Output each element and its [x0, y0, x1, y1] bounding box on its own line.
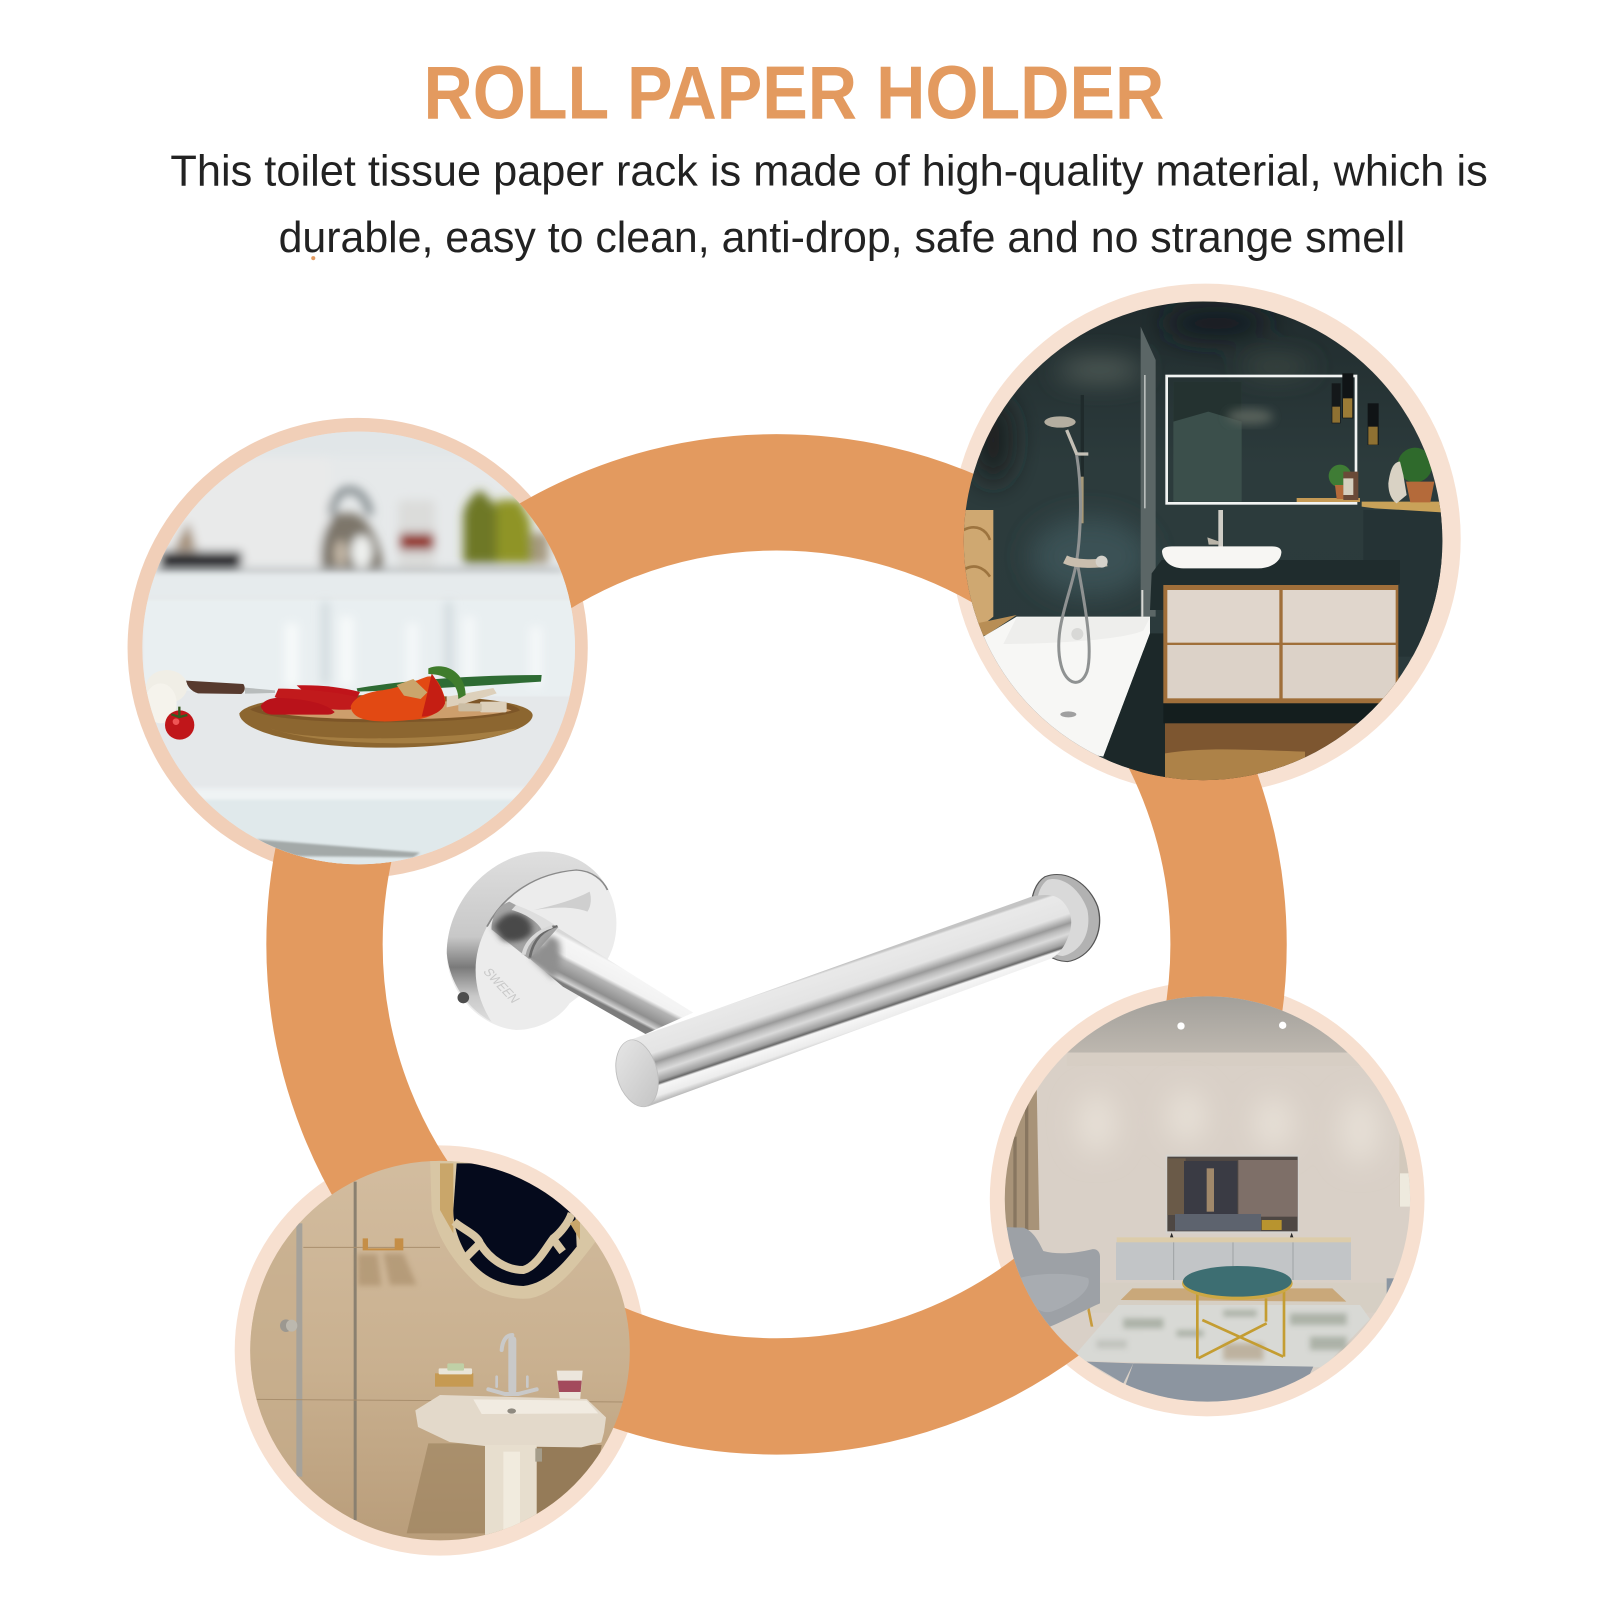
- wood panel: [960, 510, 1017, 637]
- infographic canvas: [128, 66, 1486, 1556]
- description text: This toilet tissue paper rack is made of high-quality material, which is: [170, 147, 1488, 196]
- support arm: [491, 902, 693, 1034]
- sink with faucet: [1150, 510, 1364, 610]
- wall base disc: SWEEN: [480, 966, 523, 1005]
- door knob: [280, 1319, 297, 1332]
- mirror: [1167, 376, 1356, 503]
- TV: [1166, 1155, 1299, 1233]
- towel shelf: [357, 1238, 417, 1286]
- wood floor: [1165, 723, 1358, 780]
- rug: [1070, 1305, 1370, 1367]
- description text: durable, easy to clean, anti-drop, safe and no strange smell: [279, 213, 1405, 262]
- shelf with plants: [1297, 448, 1442, 512]
- bathtub: [983, 617, 1150, 757]
- mushrooms and tomato: [145, 670, 194, 740]
- armchair: [1000, 1227, 1100, 1327]
- pendant lamps: [1332, 373, 1379, 445]
- photo: beige bathroom: [240, 1150, 640, 1550]
- product: toilet paper holder: [447, 852, 1100, 1107]
- mirror: [430, 1150, 597, 1299]
- vegetables: [261, 666, 542, 721]
- photo: living room: [1004, 996, 1410, 1402]
- washbasin: [415, 1395, 606, 1538]
- horizontal bar: [630, 895, 1071, 1107]
- faucet: [488, 1335, 537, 1394]
- photo: kitchen: [142, 432, 575, 864]
- wall art: [1400, 1135, 1410, 1206]
- description text: [170, 147, 1488, 262]
- knife: [186, 681, 275, 694]
- cutting board: [239, 695, 533, 748]
- coffee table: [1182, 1266, 1293, 1358]
- title: ROLL PAPER HOLDER: [423, 51, 1164, 135]
- door frames: [257, 1182, 627, 1520]
- right wall: [1412, 510, 1442, 657]
- vanity cabinet: [1163, 585, 1398, 703]
- soap dish: [435, 1363, 473, 1387]
- wall base disc: [447, 852, 616, 1030]
- bar end cap: [616, 1040, 658, 1107]
- TV console: [1116, 1237, 1351, 1280]
- far flange: [1031, 874, 1100, 962]
- shower set: [1044, 395, 1108, 682]
- shadows below basin: [407, 1443, 602, 1533]
- photo halos: [128, 284, 1461, 1556]
- shower glass: [1141, 327, 1156, 617]
- sofa in foreground: [1087, 1362, 1314, 1402]
- cup: [557, 1371, 583, 1401]
- connecting orange ring: [324, 492, 1229, 1396]
- countertop: [156, 697, 570, 864]
- curtain: [1004, 1090, 1040, 1230]
- photo: dark bathroom: [950, 290, 1450, 790]
